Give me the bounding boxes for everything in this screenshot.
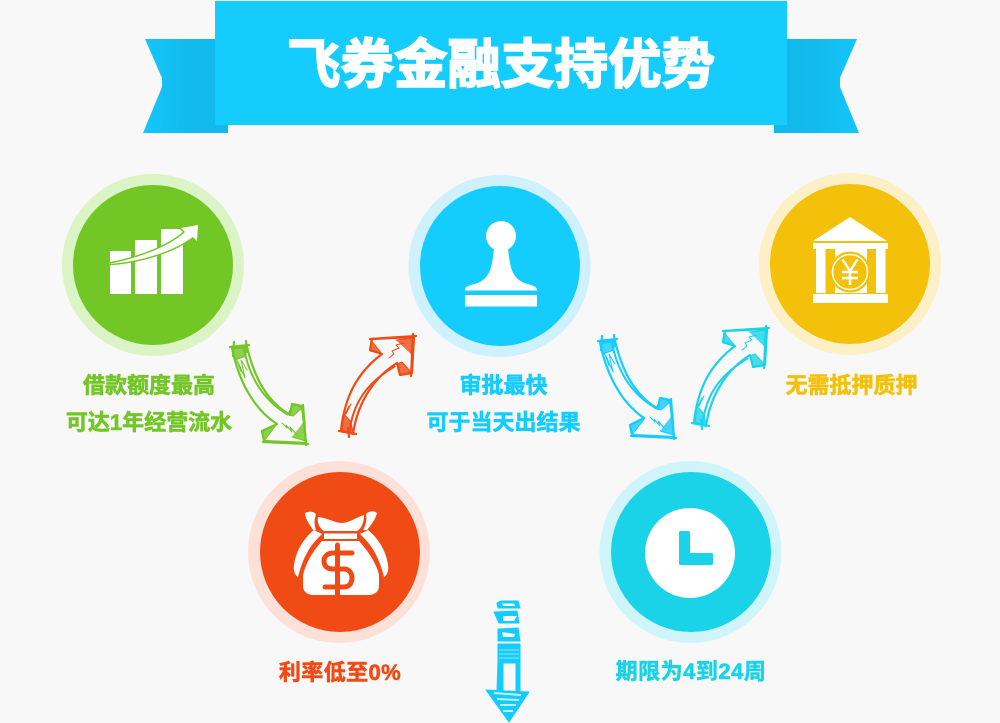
icon: growth chart (62, 174, 244, 356)
panel: loan term (600, 461, 782, 684)
text: approval speed: 可于当天出结果 (426, 410, 581, 435)
panel: loan amount (62, 174, 244, 435)
arrow: teal up (692, 326, 769, 429)
title banner: 飞券金融支持优势 (287, 36, 715, 95)
icon: money bag (248, 461, 430, 643)
arrow: blue down (598, 335, 676, 439)
icon: clock (600, 461, 782, 643)
icon: stamp (408, 175, 590, 357)
panel: no collateral (759, 173, 941, 398)
panel: approval speed (408, 175, 590, 435)
text: interest rate: 利率低至0% (279, 660, 401, 685)
text: loan amount: 可达1年经营流水 (66, 410, 232, 435)
arrow: red up (339, 334, 416, 437)
icon: bank (759, 173, 941, 355)
text: loan amount (66, 373, 232, 435)
arrow: dashed down (486, 601, 529, 722)
panel: interest rate (248, 461, 430, 685)
text: approval speed (426, 373, 581, 435)
text: loan amount: 借款额度最高 (83, 373, 215, 398)
title banner (143, 1, 859, 133)
text: no collateral: 无需抵押质押 (785, 373, 918, 398)
text: loan term: 期限为4到24周 (616, 659, 766, 684)
text: approval speed: 审批最快 (459, 373, 548, 398)
arrow: green down (230, 341, 308, 445)
